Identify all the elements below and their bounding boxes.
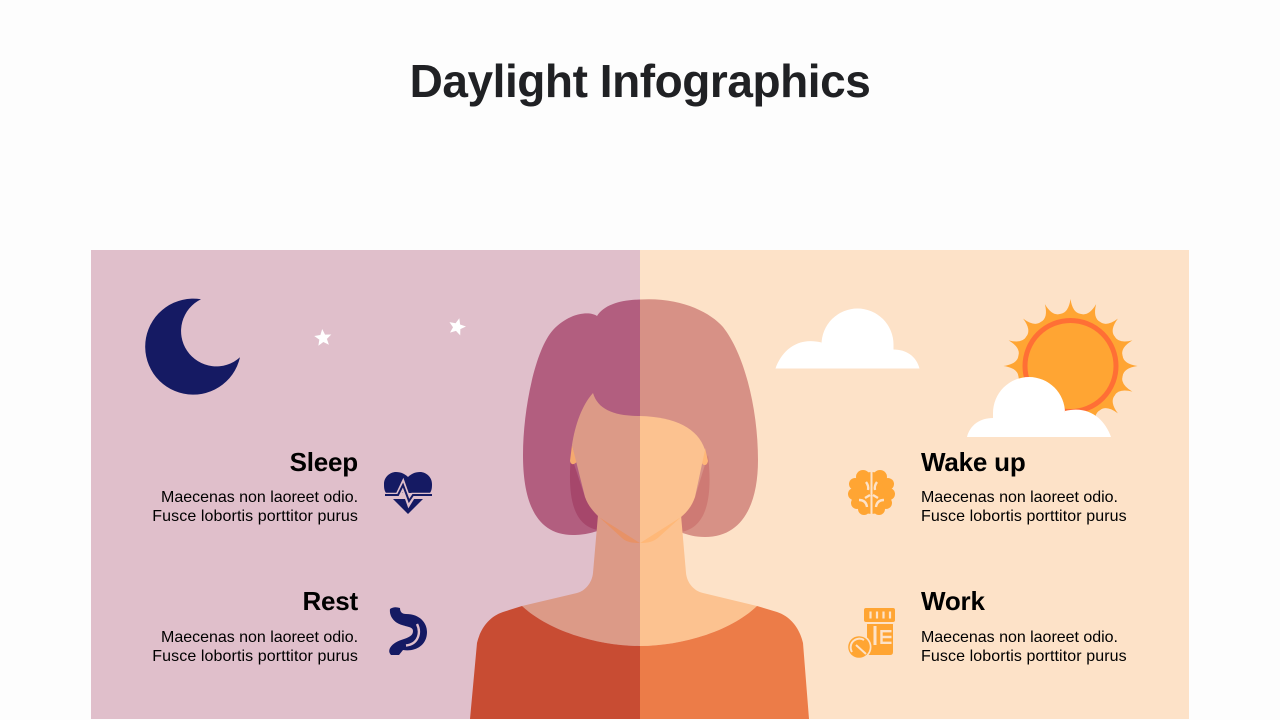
inner hair right bbox=[681, 455, 710, 532]
text: sleep bbox=[152, 447, 358, 525]
text: work: Maecenas non laoreet odio. bbox=[921, 629, 1118, 646]
icon: cloud upper bbox=[776, 308, 920, 368]
figure: woman half night half day bbox=[470, 299, 809, 719]
ear left bbox=[570, 445, 577, 464]
neck right bbox=[640, 515, 757, 646]
text: rest: Maecenas non laoreet odio. bbox=[161, 629, 358, 646]
icon: cloud over sun bbox=[967, 377, 1111, 437]
text: rest bbox=[152, 586, 358, 665]
shirt left bbox=[470, 606, 640, 719]
hair left bbox=[523, 300, 640, 535]
icon: brain bbox=[848, 466, 895, 518]
text: rest: Fusce lobortis porttitor purus bbox=[152, 648, 358, 665]
text: sleep: Fusce lobortis porttitor purus bbox=[152, 508, 358, 525]
text: rest: Rest bbox=[302, 586, 358, 616]
icon: stomach bbox=[389, 607, 427, 655]
shirt right bbox=[640, 606, 809, 719]
hair right bbox=[640, 299, 758, 537]
text: work: Work bbox=[921, 586, 985, 616]
panel: day bbox=[640, 250, 1189, 719]
text: sleep: Sleep bbox=[290, 447, 358, 477]
icon: sun bbox=[1004, 299, 1138, 433]
icon: heart pulse bbox=[380, 472, 436, 514]
chin shadow left bbox=[599, 517, 640, 543]
inner hair left bbox=[570, 455, 600, 530]
title: Daylight Infographics bbox=[410, 55, 870, 107]
face left bbox=[572, 393, 640, 543]
text: sleep: Maecenas non laoreet odio. bbox=[161, 489, 358, 506]
text: wake up: Maecenas non laoreet odio. bbox=[921, 489, 1118, 506]
icon: star right bbox=[447, 316, 468, 336]
text: wake up: Wake up bbox=[921, 447, 1026, 477]
icon: pill bottle bbox=[846, 608, 895, 660]
text: work bbox=[921, 586, 1127, 665]
text: wake up bbox=[921, 447, 1127, 525]
ear right bbox=[702, 448, 708, 465]
chin shadow right bbox=[640, 517, 681, 543]
text: work: Fusce lobortis porttitor purus bbox=[921, 648, 1127, 665]
icon: moon bbox=[145, 299, 240, 395]
text: wake up: Fusce lobortis porttitor purus bbox=[921, 508, 1127, 525]
panel: night bbox=[91, 250, 640, 719]
icon: star left bbox=[314, 328, 332, 346]
face right bbox=[640, 416, 705, 543]
neck left bbox=[522, 515, 640, 646]
